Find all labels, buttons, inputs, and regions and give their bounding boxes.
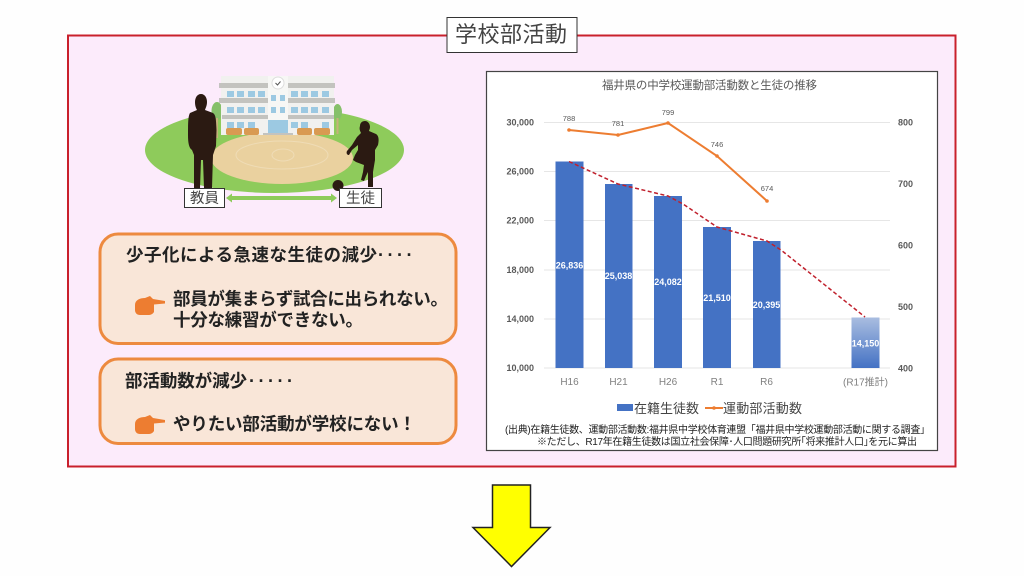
line value labels: 799 — [662, 108, 674, 117]
panel: chart — [486, 72, 938, 450]
gridlines — [544, 122, 890, 368]
bar value labels: 25,038 — [605, 271, 632, 281]
x axis labels: (R17推計) — [843, 376, 888, 388]
right axis labels: 600 — [898, 240, 913, 250]
source note: ※ただし、R17年在籍生徒数は国立社会保障･人口問題研究所｢将来推計人口｣を元に算出 — [537, 435, 917, 448]
bar value labels: 21,510 — [703, 293, 731, 303]
arrow: yellow down arrow — [473, 485, 550, 566]
callout body text: やりたい部活動が学校にない！ — [173, 414, 416, 434]
trees — [212, 102, 222, 120]
line value labels: 674 — [761, 184, 773, 193]
teacher silhouette — [188, 94, 216, 188]
source note: (出典)在籍生徒数、運動部活動数:福井県中学校体育連盟「福井県中学校運動部活動に関する調査」 — [505, 423, 930, 436]
legend: 在籍生徒数 — [634, 401, 699, 416]
chart title: 福井県の中学校運動部活動数と生徒の推移 — [602, 78, 818, 92]
bar value labels: 20,395 — [753, 300, 780, 310]
soccer ball — [332, 180, 344, 191]
x axis labels: H16 — [560, 377, 579, 388]
line value labels — [563, 108, 773, 193]
heading dots: ····· — [249, 371, 296, 391]
bar value labels: 26,836 — [556, 260, 583, 270]
illustration: school, field, teacher and student — [145, 76, 404, 208]
legend — [617, 401, 802, 416]
x axis labels: R1 — [711, 377, 724, 388]
title: 学校部活動 — [455, 22, 567, 47]
double arrow — [226, 194, 337, 202]
label: student: 生徒 — [346, 190, 375, 207]
label: teacher: 教員 — [190, 190, 219, 207]
left axis labels: 26,000 — [506, 166, 534, 176]
label: student — [340, 188, 382, 208]
callout body text: 十分な練習ができない。 — [173, 310, 363, 330]
left axis labels: 14,000 — [506, 314, 534, 324]
heading dots: ···· — [378, 245, 416, 265]
school building — [212, 76, 342, 138]
dashed trend line — [569, 162, 865, 317]
callout heading: 部活動数が減少 — [125, 371, 248, 391]
callout heading: 少子化による急速な生徒の減少 — [126, 245, 378, 265]
callout: fewer clubs — [100, 359, 456, 444]
callout body text: 部員が集まらず試合に出られない。 — [173, 289, 448, 309]
right axis labels: 700 — [898, 179, 913, 189]
x axis labels: H21 — [609, 377, 628, 388]
bar value labels — [556, 260, 879, 348]
callout: rapid decline in students — [100, 234, 456, 344]
icon: pointing hand — [135, 296, 165, 315]
left axis labels: 10,000 — [506, 363, 534, 373]
panel: school club activities frame — [68, 36, 956, 466]
dirt playground — [211, 132, 353, 184]
left axis labels — [506, 118, 534, 373]
x axis labels — [560, 376, 888, 388]
bar value labels: 24,082 — [654, 277, 682, 287]
x axis labels: H26 — [659, 377, 678, 388]
right axis labels: 500 — [898, 302, 913, 312]
x axis labels: R6 — [760, 377, 773, 388]
legend: 運動部活動数 — [723, 401, 802, 416]
title — [447, 18, 577, 52]
line value labels: 746 — [711, 140, 723, 149]
student silhouette — [347, 121, 379, 187]
bar: R17 estimate — [852, 318, 880, 368]
bar value labels: 14,150 — [852, 338, 879, 348]
left axis labels: 22,000 — [506, 216, 534, 226]
icon: pointing hand — [135, 415, 165, 434]
right axis labels — [898, 118, 913, 374]
bars: enrolled students — [556, 162, 780, 368]
line: club count — [567, 121, 769, 203]
left axis labels: 30,000 — [506, 118, 534, 128]
green field — [145, 107, 404, 193]
line value labels: 788 — [563, 114, 575, 123]
left axis labels: 18,000 — [506, 265, 534, 275]
line value labels: 781 — [612, 119, 624, 128]
right axis labels: 400 — [898, 364, 913, 374]
right axis labels: 800 — [898, 118, 913, 128]
label: teacher — [184, 188, 224, 208]
